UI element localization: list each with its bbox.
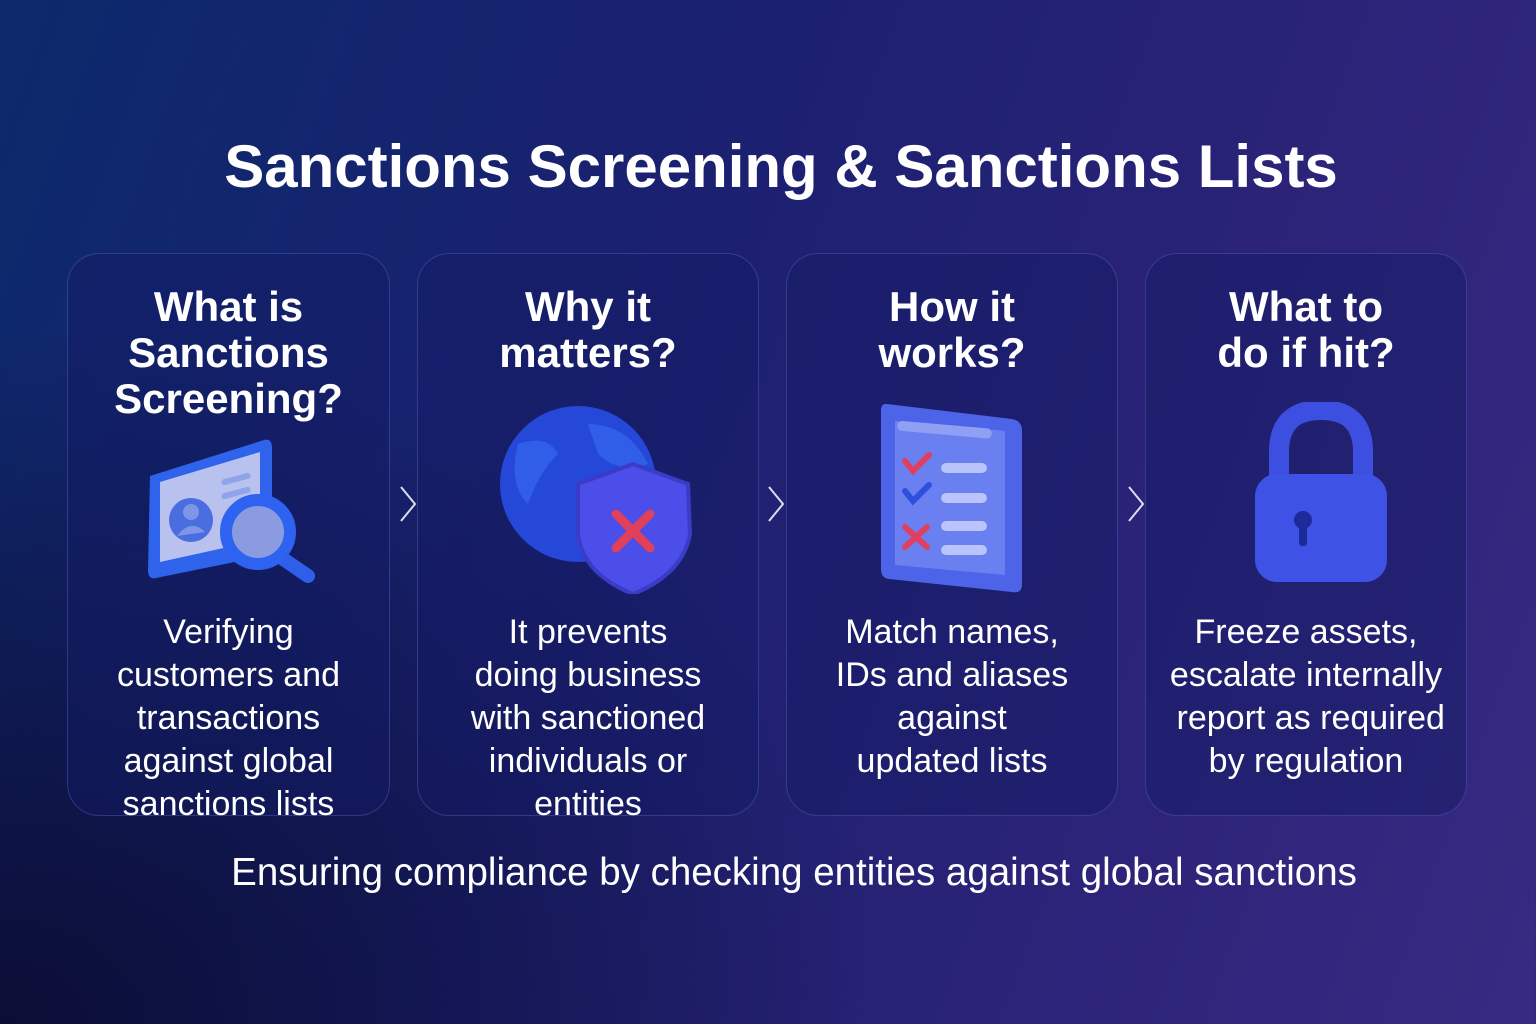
heading: what is: Screening? <box>114 375 343 422</box>
panel: what is <box>67 253 390 816</box>
heading: how <box>878 283 1026 376</box>
body: how: against <box>897 699 1007 737</box>
body: what to do: by regulation <box>1209 742 1403 780</box>
icon: checklist <box>881 404 1022 592</box>
panel: how <box>786 253 1118 816</box>
body: what is: customers and <box>117 656 340 694</box>
body: why: doing business <box>475 656 701 694</box>
icon: id card with magnifier <box>148 440 315 583</box>
body: what is <box>117 613 340 823</box>
body: what is: sanctions lists <box>123 785 334 823</box>
arrow 2 <box>768 486 784 522</box>
heading: how: How it <box>889 283 1015 330</box>
body: how <box>836 613 1068 780</box>
title: Sanctions Screening & Sanctions Lists <box>224 133 1338 200</box>
heading: what to do: do if hit? <box>1217 329 1395 376</box>
body: what to do: escalate internally <box>1170 656 1442 694</box>
body: what to do: report as required <box>1177 699 1445 737</box>
body: what to do <box>1170 613 1445 780</box>
heading: what to do <box>1217 283 1395 376</box>
body: how: updated lists <box>857 742 1047 780</box>
body: what is: Verifying <box>163 613 294 651</box>
body: what is: transactions <box>137 699 320 737</box>
heading: why <box>499 283 677 376</box>
body: why: It prevents <box>509 613 667 651</box>
panel: why <box>417 253 759 816</box>
arrow 3 <box>1128 486 1144 522</box>
heading: what to do: What to <box>1229 283 1383 330</box>
icon: padlock <box>1255 402 1387 582</box>
icon: globe with shield <box>500 406 692 594</box>
panel: what to do <box>1145 253 1467 816</box>
body: why: individuals or <box>489 742 687 780</box>
footer caption: Ensuring compliance by checking entities against global sanctions <box>231 851 1357 894</box>
heading: what is: Sanctions <box>128 329 329 376</box>
heading: what is: What is <box>154 283 303 330</box>
body: why: entities <box>534 785 642 823</box>
body: what is: against global <box>124 742 333 780</box>
body: how: IDs and aliases <box>836 656 1068 694</box>
arrow 1 <box>400 486 416 522</box>
body: what to do: Freeze assets, <box>1194 613 1417 651</box>
body: how: Match names, <box>845 613 1059 651</box>
body: why: with sanctioned <box>471 699 705 737</box>
heading: why: Why it <box>525 283 651 330</box>
heading: why: matters? <box>499 329 677 376</box>
heading: what is <box>114 283 343 422</box>
body: why <box>470 613 705 823</box>
heading: how: works? <box>878 329 1026 376</box>
